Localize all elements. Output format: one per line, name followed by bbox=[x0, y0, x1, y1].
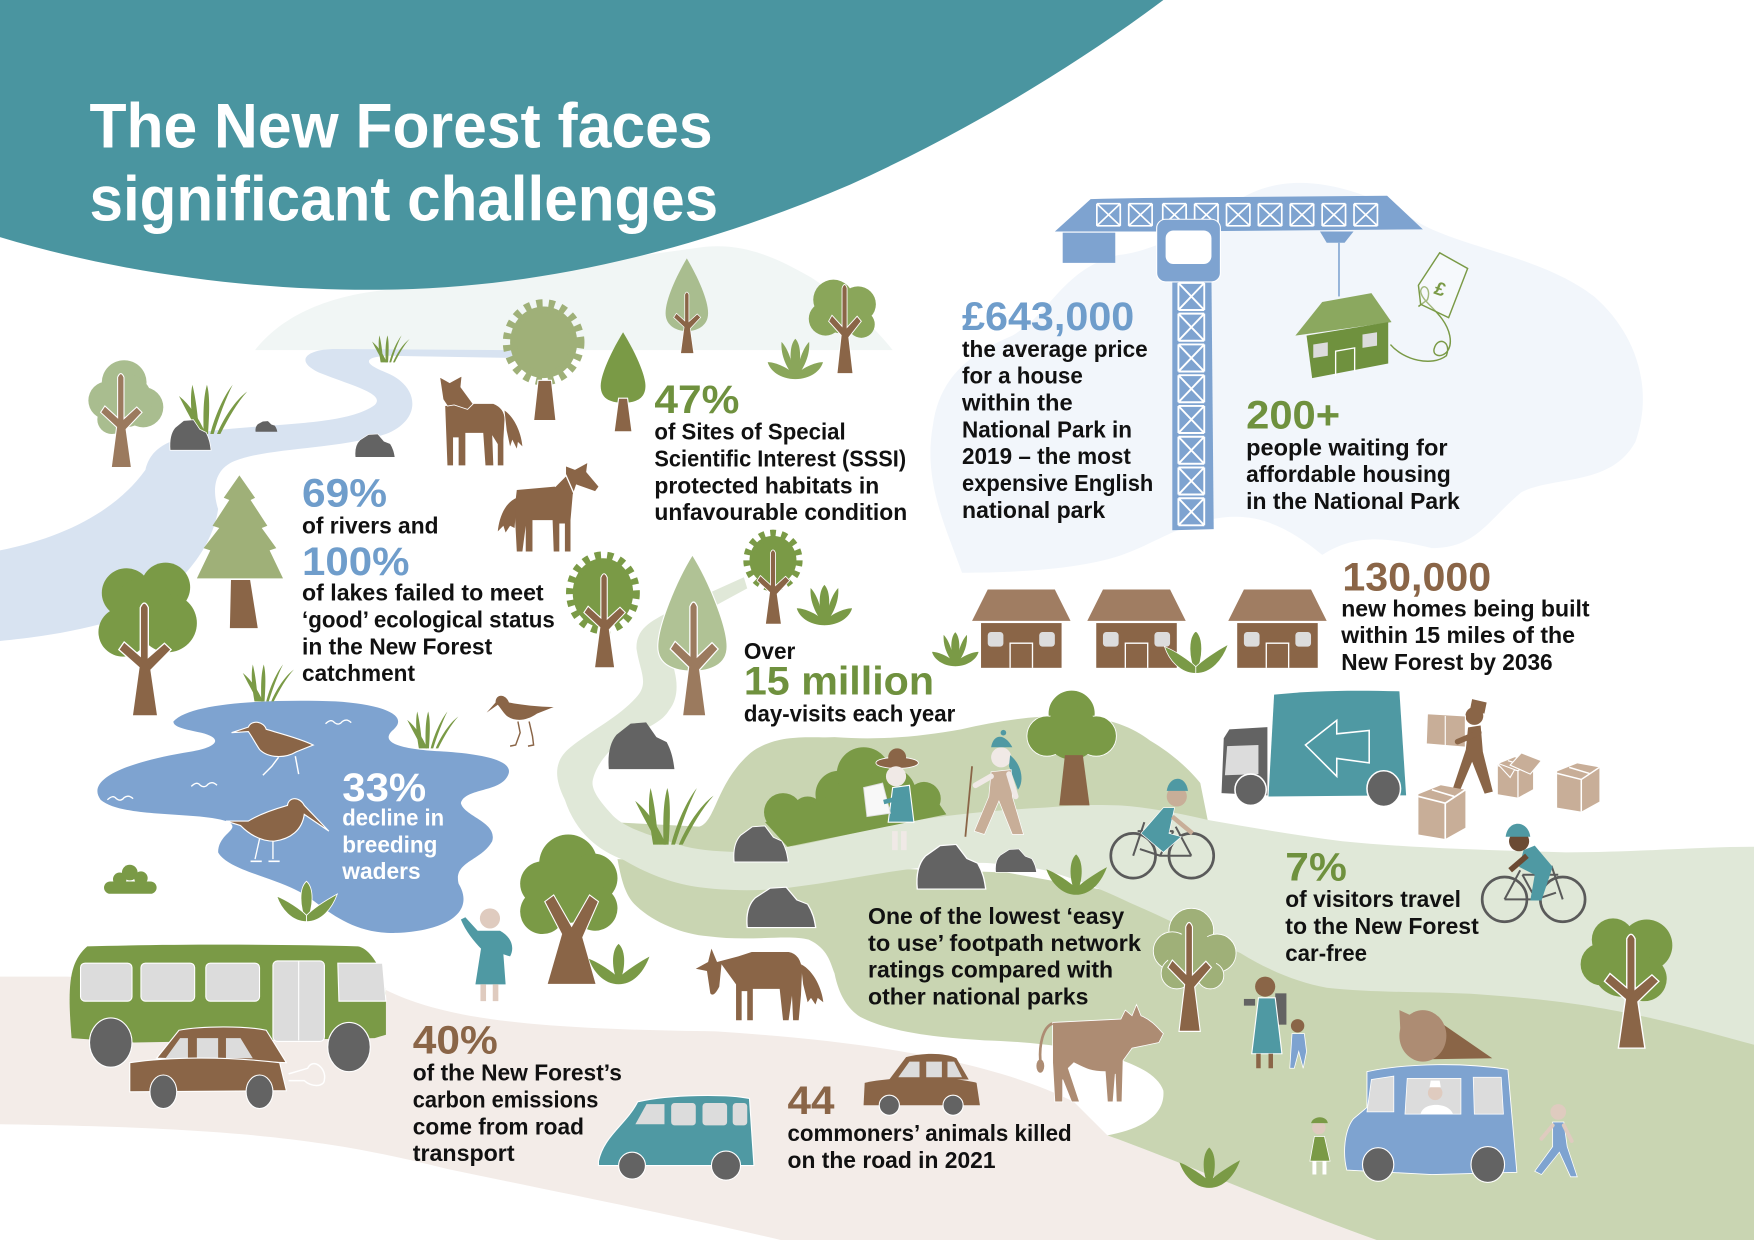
stat: carbon emissions bbox=[413, 1018, 622, 1166]
background: green hill bbox=[613, 716, 1210, 856]
stat: footpath network bbox=[868, 903, 1141, 1010]
tree: cloud right bbox=[1581, 918, 1672, 1048]
tree: pale cloud tree left bbox=[88, 360, 163, 468]
background: footpath bbox=[557, 577, 1754, 1045]
stat: average house price: £643,000 bbox=[962, 294, 1134, 339]
stat: affordable housing: affordable housing bbox=[1246, 461, 1451, 487]
sprouts centre bbox=[797, 585, 852, 625]
stat: average house price: expensive English bbox=[962, 470, 1153, 496]
stat: day visits bbox=[744, 638, 955, 727]
stat: day visits: day-visits each year bbox=[744, 701, 955, 727]
background: river bbox=[0, 349, 515, 641]
stat: footpath network: One of the lowest ‘easy bbox=[868, 903, 1124, 929]
title: The New Forest faces bbox=[89, 92, 713, 162]
woman with binoculars and child bbox=[1244, 977, 1307, 1068]
lake ripples bbox=[107, 720, 351, 800]
stat: carbon emissions: carbon emissions bbox=[413, 1086, 598, 1112]
stat: carbon emissions: transport bbox=[413, 1140, 515, 1166]
horse 2 bbox=[498, 463, 598, 551]
stat: rivers and lakes: 100% bbox=[302, 539, 409, 584]
row of brown houses bbox=[932, 590, 1327, 673]
delivery person bbox=[1426, 699, 1493, 794]
horse 3 bbox=[696, 949, 823, 1020]
stat: breeding waders bbox=[341, 765, 444, 884]
stat: breeding waders: 33% bbox=[342, 765, 426, 810]
tree: spiky tree centre bbox=[749, 536, 796, 624]
stat: new homes: within 15 miles of the bbox=[1340, 622, 1575, 648]
stat: new homes bbox=[1340, 555, 1590, 675]
stat: average house price bbox=[961, 294, 1153, 523]
cyclist 2 bbox=[1482, 824, 1585, 922]
small bush bbox=[104, 865, 157, 894]
person waving bbox=[461, 908, 512, 1001]
stat: average house price: National Park in bbox=[962, 416, 1132, 442]
child walking bbox=[1535, 1104, 1577, 1177]
tree: large pale cone bbox=[658, 555, 727, 716]
stat: footpath network: ratings compared with bbox=[868, 957, 1113, 983]
background: pale forest area bbox=[255, 246, 893, 350]
stat: sites of special scientific interest: of Sites of Special bbox=[654, 419, 846, 445]
stat: sites of special scientific interest: unfavourable condition bbox=[654, 499, 907, 525]
ice cream van bbox=[1345, 1010, 1517, 1182]
cardboard boxes bbox=[1418, 753, 1599, 839]
stat: footpath network: to use’ footpath network bbox=[868, 930, 1141, 956]
small brown car bbox=[864, 1054, 980, 1115]
stat: new homes: new homes being built bbox=[1341, 595, 1590, 621]
cyclist 1 bbox=[1111, 779, 1214, 878]
stat: rivers and lakes: of rivers and bbox=[302, 513, 438, 539]
sprout by tree bottom bbox=[1179, 1147, 1240, 1188]
stat: affordable housing: 200+ bbox=[1246, 392, 1340, 437]
background: road bbox=[0, 977, 1378, 1240]
horse 1 bbox=[440, 376, 522, 465]
bird on lake 1 bbox=[232, 722, 313, 775]
background: housing blob bbox=[930, 183, 1643, 573]
sprout by lake bbox=[277, 881, 337, 922]
tree: pale cloud centre right bbox=[1153, 908, 1236, 1031]
grass and rocks by river bbox=[170, 335, 410, 457]
stat: rivers and lakes: catchment bbox=[302, 660, 415, 686]
stat: rivers and lakes bbox=[302, 471, 555, 686]
grass by lake bbox=[243, 664, 458, 748]
crane bbox=[1055, 196, 1423, 530]
stat: breeding waders: waders bbox=[341, 858, 421, 884]
stat: affordable housing: people waiting for bbox=[1246, 434, 1448, 460]
hiker with map bbox=[864, 748, 918, 850]
stat: average house price: within the bbox=[961, 390, 1073, 416]
stat: rivers and lakes: of lakes failed to meet bbox=[302, 580, 544, 606]
stat: carbon emissions: of the New Forest’s bbox=[413, 1060, 622, 1086]
stat: sites of special scientific interest bbox=[654, 377, 907, 525]
stat: car-free visitors: car-free bbox=[1285, 940, 1367, 966]
stat: sites of special scientific interest: Scientific Interest (SSSI) bbox=[654, 445, 906, 471]
tree: spiky tree centre left bbox=[573, 558, 633, 668]
tree: cloud tree top bbox=[809, 280, 876, 374]
stat: day visits: Over bbox=[744, 638, 795, 664]
stat: new homes: 130,000 bbox=[1342, 555, 1491, 600]
tree: dark cone bbox=[601, 332, 645, 432]
stat: average house price: national park bbox=[962, 497, 1105, 523]
stat: average house price: for a house bbox=[962, 363, 1083, 389]
bus bbox=[70, 945, 386, 1072]
stat: affordable housing bbox=[1246, 392, 1460, 514]
stat: animals killed: commoners’ animals killed bbox=[788, 1120, 1072, 1146]
title: significant challenges bbox=[89, 164, 718, 234]
stat: new homes: New Forest by 2036 bbox=[1341, 649, 1553, 675]
sprout on path bbox=[1046, 854, 1107, 895]
stat: sites of special scientific interest: protected habitats in bbox=[654, 472, 879, 498]
stat: car-free visitors: 7% bbox=[1285, 844, 1347, 889]
sprout near tree bbox=[589, 944, 649, 984]
big grass by path bbox=[635, 788, 714, 845]
stat: average house price: the average price bbox=[962, 336, 1148, 362]
stat: rivers and lakes: 69% bbox=[302, 471, 387, 516]
green house with price tag: £ bbox=[1431, 278, 1449, 302]
title bbox=[89, 92, 718, 234]
cow bbox=[1036, 1005, 1163, 1102]
stat: animals killed: 44 bbox=[788, 1078, 835, 1123]
stat: car-free visitors: to the New Forest bbox=[1285, 913, 1479, 939]
stat: animals killed bbox=[788, 1078, 1072, 1173]
tree: spiky tree bbox=[510, 307, 577, 421]
sprout top bbox=[768, 339, 823, 379]
stat: rivers and lakes: in the New Forest bbox=[302, 633, 493, 659]
brown car bbox=[130, 1027, 325, 1109]
tree: cloud tree left bbox=[98, 563, 197, 716]
background: dark green meadow bbox=[617, 859, 1754, 1240]
stat: day visits: 15 million bbox=[744, 659, 934, 704]
stat: sites of special scientific interest: 47% bbox=[654, 377, 739, 422]
stat: breeding waders: breeding bbox=[342, 831, 437, 857]
bird on shore bbox=[487, 696, 554, 746]
stat: animals killed: on the road in 2021 bbox=[788, 1147, 996, 1173]
delivery truck bbox=[1222, 691, 1406, 807]
tree: cloud near road bbox=[520, 834, 617, 984]
bushes on hill bbox=[764, 747, 946, 847]
stat: rivers and lakes: ‘good’ ecological status bbox=[302, 607, 555, 633]
stat: breeding waders: decline in bbox=[342, 805, 444, 831]
walker with stick bbox=[965, 730, 1024, 837]
tree: pale cone top bbox=[666, 258, 708, 353]
green house with price tag bbox=[1295, 253, 1468, 378]
tree on hill bbox=[1027, 690, 1116, 805]
bird on lake 2 bbox=[226, 799, 329, 861]
stat: car-free visitors bbox=[1285, 844, 1479, 966]
lake bbox=[97, 701, 509, 933]
stat: average house price: 2019 – the most bbox=[962, 443, 1131, 469]
teal van bbox=[598, 1095, 754, 1180]
stat: carbon emissions: 40% bbox=[413, 1018, 498, 1063]
stat: car-free visitors: of visitors travel bbox=[1285, 886, 1461, 912]
tree: pine bbox=[197, 475, 283, 629]
stat: affordable housing: in the National Park bbox=[1246, 488, 1460, 514]
child with ice cream bbox=[1310, 1117, 1330, 1175]
stat: footpath network: other national parks bbox=[868, 984, 1088, 1010]
stat: carbon emissions: come from road bbox=[413, 1113, 584, 1139]
header banner bbox=[0, 0, 1163, 290]
rocks by path bbox=[608, 722, 1037, 928]
